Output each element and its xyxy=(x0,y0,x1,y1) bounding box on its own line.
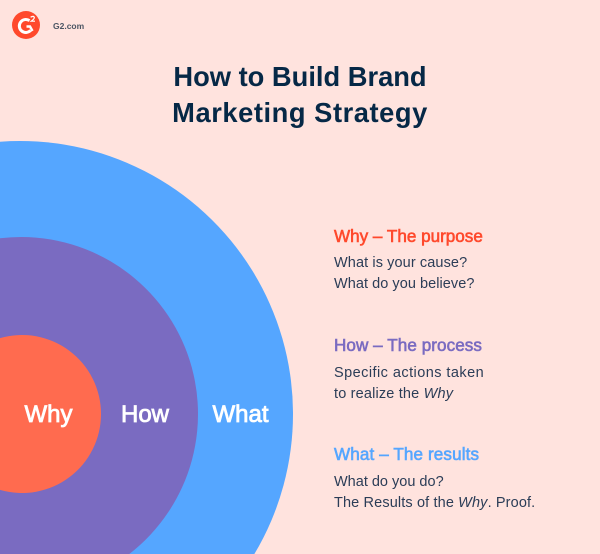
inner circle: Why: Why xyxy=(24,401,72,428)
heading: how: How – The process xyxy=(334,336,482,355)
title: Marketing Strategy xyxy=(172,97,428,128)
inner circle: Why xyxy=(0,335,101,493)
text: what: The Results of the Why. Proof. xyxy=(334,494,535,510)
heading: what: What – The results xyxy=(334,445,479,464)
title xyxy=(172,61,428,128)
middle circle: How xyxy=(0,237,198,554)
heading: why: Why – The purpose xyxy=(334,227,483,246)
icon: G2 logo xyxy=(12,11,40,39)
title: How to Build Brand xyxy=(173,61,427,92)
text: why: What is your cause? xyxy=(334,255,467,271)
text: how: to realize the Why xyxy=(334,386,453,402)
text: why xyxy=(334,255,474,292)
outer circle: What: What xyxy=(212,401,269,428)
middle circle: How: How xyxy=(121,401,170,428)
site label: G2.com xyxy=(53,21,84,31)
text: what xyxy=(334,474,535,510)
text: how xyxy=(334,365,484,402)
chart: concentric circles xyxy=(0,141,293,554)
text: how: Specific actions taken xyxy=(334,365,484,381)
text: why: What do you believe? xyxy=(334,276,474,292)
text: what: What do you do? xyxy=(334,474,444,490)
